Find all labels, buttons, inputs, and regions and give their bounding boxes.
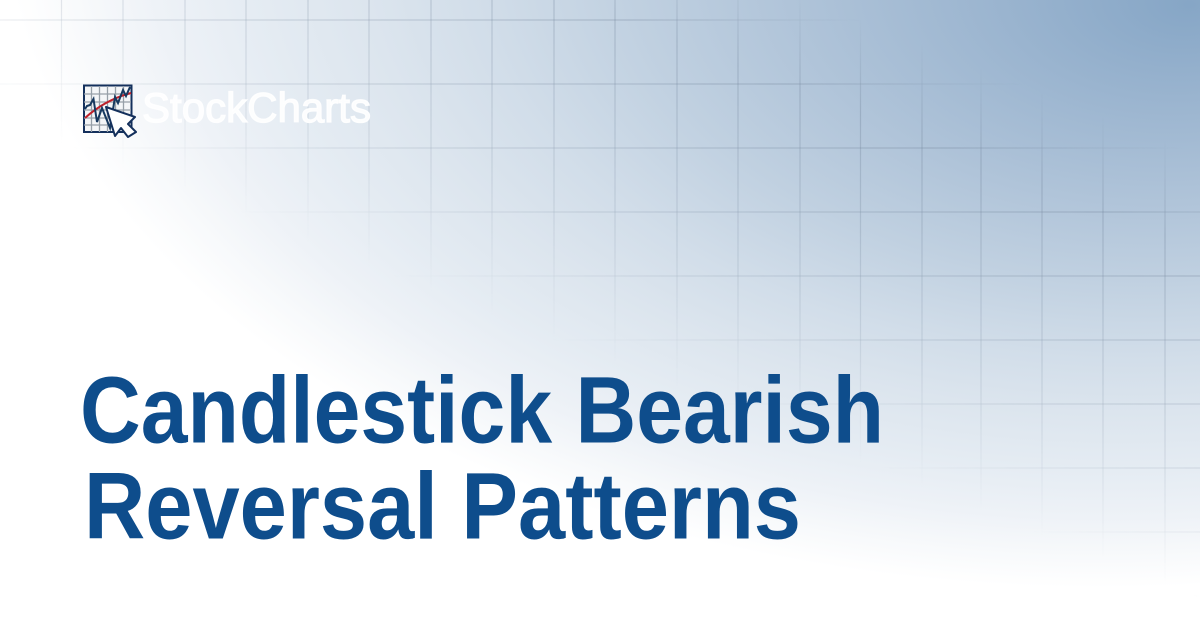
logo wordmark: StockCharts — [142, 84, 371, 131]
icon: chart with cursor — [84, 86, 136, 137]
title — [80, 358, 884, 559]
title line 1: Candlestick Bearish — [80, 358, 884, 464]
title line 2: Reversal Patterns — [84, 453, 801, 559]
logo: StockCharts — [84, 84, 371, 137]
